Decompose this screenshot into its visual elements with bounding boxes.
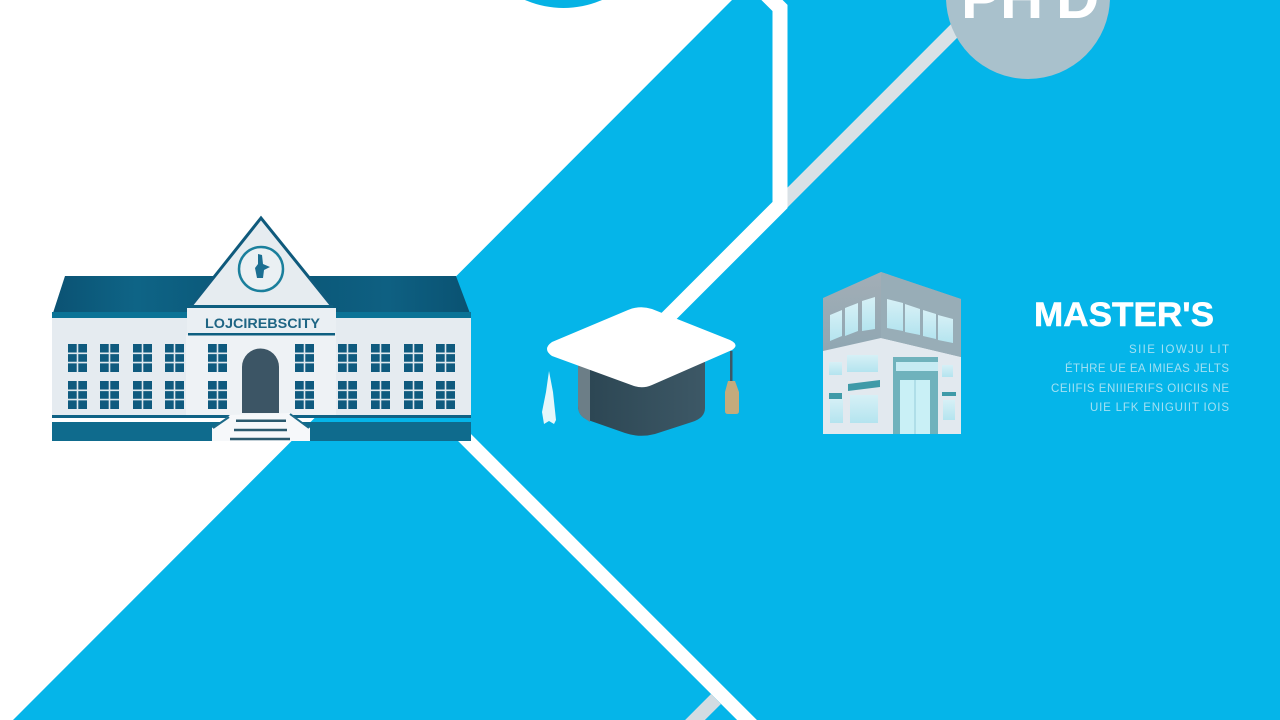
white tassel (542, 371, 556, 424)
Master's description: CEIIFIS ENIIIERIFS OIICIIS NE (1051, 383, 1229, 395)
lower awnings (829, 380, 956, 399)
windows (68, 344, 455, 409)
connector: grey line to PhD (780, 25, 960, 205)
sign band (187, 308, 336, 334)
connector: grey stub at bottom (688, 699, 716, 720)
door (242, 349, 279, 413)
Master's description (1051, 344, 1229, 414)
entrance (893, 357, 938, 434)
steps (212, 413, 310, 441)
icon: graduation cap (542, 307, 739, 436)
connector: white line from cap to top (664, 0, 780, 321)
clock emblem (239, 247, 283, 291)
Master's description: UIE LFK ENIGUIIT IOIS (1090, 402, 1229, 414)
tassel (725, 381, 739, 414)
Master's heading: MASTER'S (1034, 296, 1214, 334)
top teal circle node (467, 0, 660, 8)
Master's description: SIIE IOWJU LIT (1129, 344, 1229, 356)
upper windows (830, 297, 953, 343)
icon: university building (52, 218, 471, 441)
PhD node (946, 0, 1110, 79)
tassel cord (730, 351, 732, 383)
Master's text block (1034, 296, 1229, 414)
roof (52, 276, 471, 316)
sign text: LOJCIREBSCITY (205, 316, 320, 331)
base (52, 415, 471, 418)
Master's description: ÉTHRE UE EA IMIEAS JELTS (1065, 362, 1229, 375)
upper storey (823, 272, 961, 357)
mortarboard (547, 307, 736, 387)
lower storey (823, 336, 961, 434)
facade (52, 318, 471, 418)
icon: master's building (823, 272, 961, 434)
connector: white line to lower right (462, 435, 752, 720)
pediment (191, 218, 332, 306)
lower windows (829, 355, 955, 423)
cap body (578, 362, 705, 436)
